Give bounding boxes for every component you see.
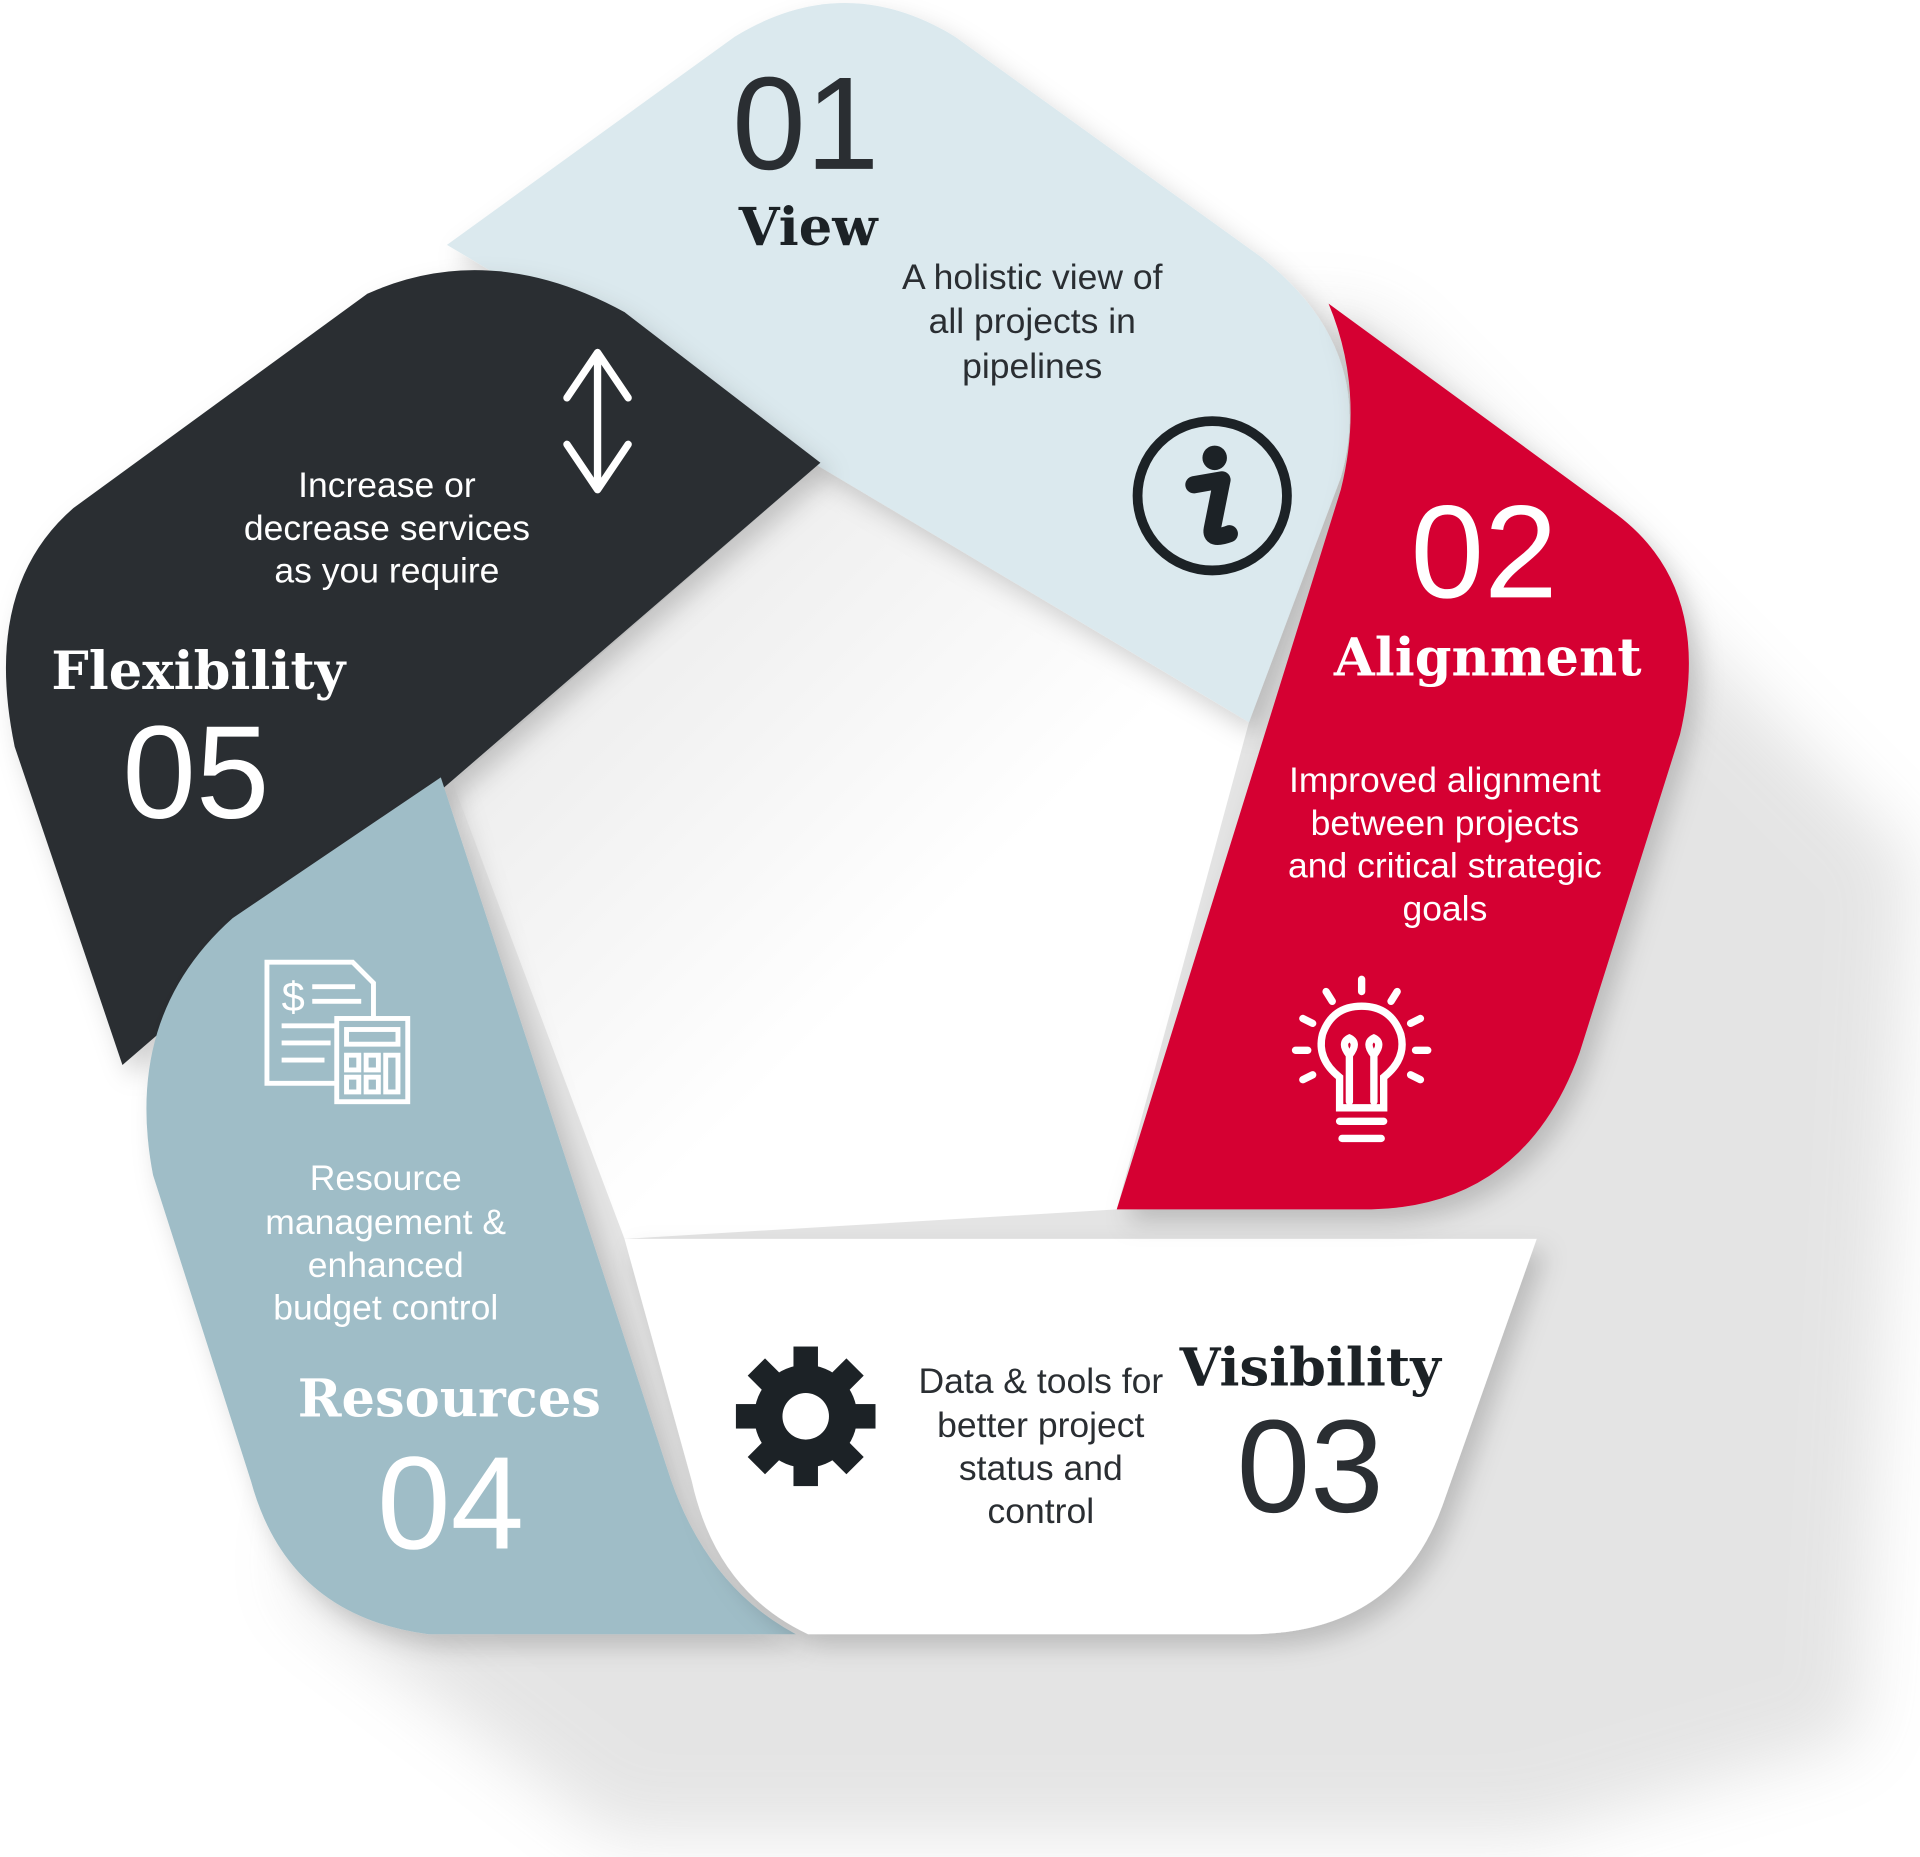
panel: 05 Flexibility bbox=[6, 270, 820, 1065]
heading: Flexibility: Flexibility bbox=[51, 641, 347, 702]
icon: light bulb bbox=[1296, 979, 1428, 1138]
text: view description: pipelines bbox=[962, 346, 1102, 386]
text: view description: A holistic view of bbox=[902, 257, 1163, 297]
panel: 01 View bbox=[447, 3, 1350, 722]
heading: Alignment: Alignment bbox=[1333, 628, 1642, 689]
heading: Visibility: Visibility bbox=[1179, 1338, 1442, 1399]
panel: 02 Alignment bbox=[1117, 304, 1689, 1209]
text: flexibility description: Increase or bbox=[298, 465, 476, 505]
text: alignment description: Improved alignment bbox=[1289, 760, 1601, 800]
text: visibility description: status and bbox=[959, 1448, 1123, 1488]
text: resources description: enhanced bbox=[308, 1245, 464, 1285]
heading: Resources: Resources bbox=[298, 1368, 601, 1429]
text: visibility description: control bbox=[988, 1491, 1094, 1531]
text: flexibility description: as you require bbox=[274, 551, 499, 591]
heading: View: View bbox=[738, 197, 879, 258]
panel: 04 Resources bbox=[146, 777, 796, 1634]
text: resources description: management & bbox=[265, 1202, 506, 1242]
heading: 01: 01 bbox=[732, 50, 879, 198]
background shadow bbox=[294, 318, 1910, 1836]
icon: gear bbox=[707, 1318, 904, 1515]
text: alignment description: goals bbox=[1402, 889, 1487, 929]
icon: up-down arrow bbox=[567, 353, 628, 490]
panel: 03 Visibility bbox=[624, 1239, 1537, 1634]
center fill bbox=[453, 463, 1249, 1239]
text: alignment description: and critical strategic bbox=[1288, 846, 1602, 886]
text: resources description: budget control bbox=[273, 1288, 498, 1328]
heading: 04: 04 bbox=[377, 1430, 524, 1578]
heading: 03: 03 bbox=[1237, 1393, 1384, 1541]
icon: info bbox=[1138, 421, 1287, 570]
icon: budget document bbox=[267, 962, 408, 1102]
text: view description: all projects in bbox=[929, 301, 1136, 341]
heading: 02: 02 bbox=[1411, 478, 1558, 626]
text: flexibility description: decrease services bbox=[244, 508, 530, 548]
icon: budget document: $ bbox=[282, 973, 305, 1020]
text: resources description: Resource bbox=[310, 1158, 462, 1198]
heading: 05: 05 bbox=[122, 699, 269, 847]
text: visibility description: Data & tools for bbox=[918, 1361, 1163, 1401]
text: visibility description: better project bbox=[937, 1405, 1145, 1445]
text: alignment description: between projects bbox=[1311, 803, 1579, 843]
